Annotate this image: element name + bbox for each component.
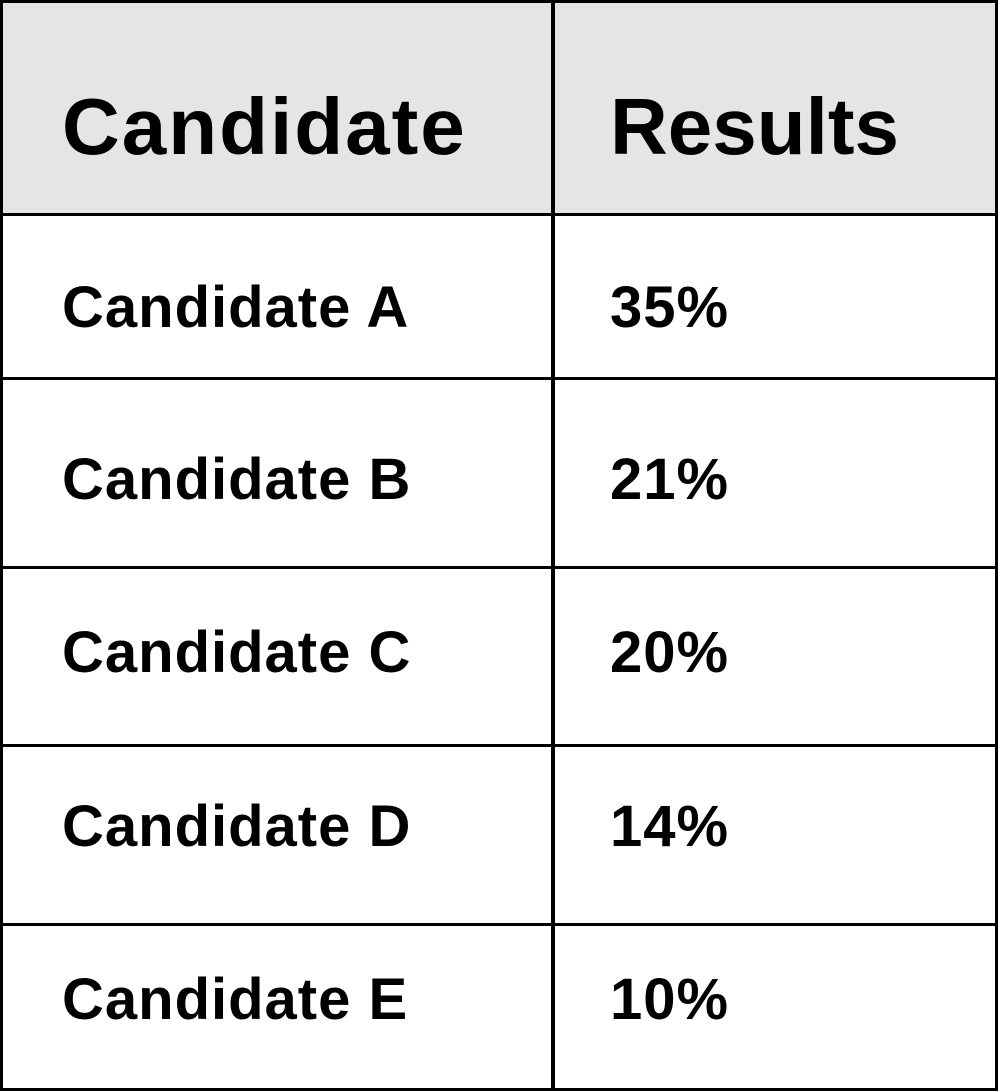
value C: 20% — [610, 620, 729, 685]
header: Candidate: Candidate — [62, 82, 467, 171]
header row background — [0, 0, 998, 215]
row B: Candidate B — [62, 447, 411, 512]
row D: Candidate D — [62, 794, 411, 859]
value E: 10% — [610, 967, 729, 1032]
value D: 14% — [610, 794, 729, 859]
header: Results: Results — [610, 82, 899, 171]
row A: Candidate A — [62, 275, 409, 340]
value A: 35% — [610, 275, 729, 340]
row E: Candidate E — [62, 967, 408, 1032]
row C: Candidate C — [62, 620, 411, 685]
value B: 21% — [610, 447, 729, 512]
